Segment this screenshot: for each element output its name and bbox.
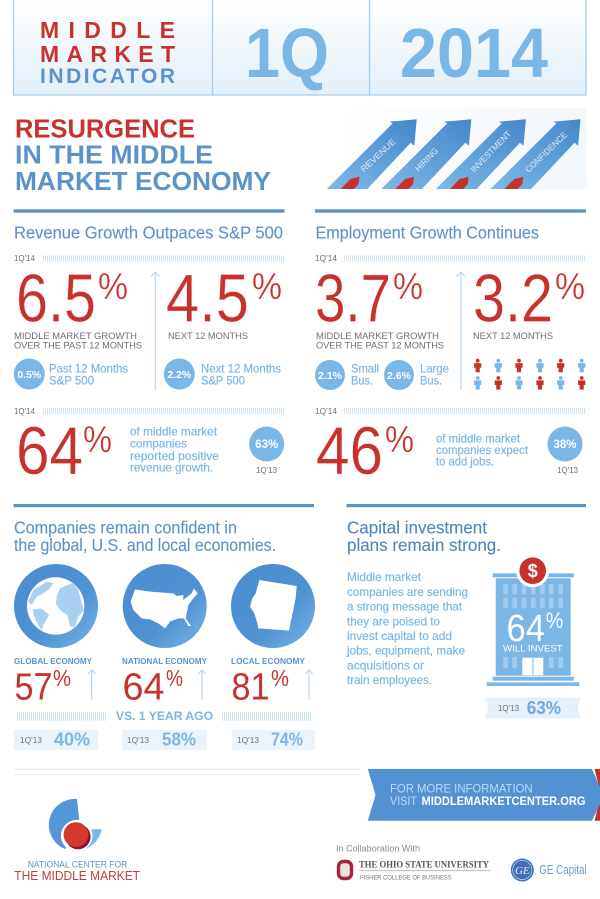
arrow: investment: [436, 119, 526, 189]
heading: capital investment: [347, 518, 501, 555]
comparison: national 1Q13: 58%: [162, 730, 196, 750]
heading: confidence: the global, U.S. and local economies.: [14, 535, 276, 555]
text: positive revenue growth: reported positive: [130, 449, 219, 463]
text: expect to add jobs: of middle market: [436, 432, 521, 446]
comparison: global 1Q13: [14, 730, 98, 750]
stat: global economy: 57: [14, 666, 52, 708]
badge: 38 percent 1Q13: [548, 426, 582, 475]
icon: USA map: [123, 564, 207, 648]
comparison: national 1Q13: [122, 730, 207, 750]
logo: National Center for the Middle Market: THE MIDDLE MARKET: [14, 869, 140, 883]
ribbon: 1Q13 63 percent: 63%: [527, 698, 561, 718]
text: capital investment body: companies are sending: [347, 585, 468, 599]
panel: employment growth: [315, 209, 586, 489]
callout: large business: Bus.: [420, 374, 442, 388]
stat: 3.2 percent next 12 months: %: [555, 266, 585, 307]
heading: capital investment: plans remain strong.: [347, 535, 501, 555]
comparison: national 1Q13: 1Q'13: [127, 735, 149, 745]
stat: 3.2 percent next 12 months: 3.2: [473, 260, 553, 336]
banner: for more information: VISIT: [390, 794, 418, 808]
text: capital investment body: train employees.: [347, 673, 432, 687]
callout: small business: 2.1%: [318, 370, 343, 382]
icon: logo mark: [49, 799, 102, 852]
panel: capital investment: [346, 504, 586, 718]
text: capital investment body: acquisitions or: [347, 658, 424, 672]
callout: S&P next 12 months: Next 12 Months: [201, 362, 281, 376]
label: vs 1 year ago: VS. 1 YEAR AGO: [116, 709, 213, 723]
comparison: local 1Q13: 1Q'13: [237, 735, 259, 745]
panel: employment growth: 1Q'14: [315, 406, 337, 416]
logo: National Center for the Middle Market: [14, 799, 140, 883]
heading: confidence: [14, 518, 276, 555]
logos: collaboration partners: [336, 844, 587, 882]
icon: globe: [14, 564, 98, 648]
panel: employment growth: 1Q'14: [315, 253, 337, 263]
icon: state map: [231, 564, 315, 648]
stat: 3.7 percent past 12 months: [315, 260, 444, 352]
stat: global economy: [14, 656, 95, 708]
callout: large business: [384, 360, 449, 390]
arrow: hiring: [381, 119, 471, 189]
logo: National Center for the Middle Market: NATIONAL CENTER FOR: [28, 860, 127, 871]
headline: Resurgence in the middle market economy: IN THE MIDDLE: [15, 142, 213, 170]
title: Middle Market Indicator: MARKET: [40, 41, 175, 67]
arrow: investment: INVESTMENT: [468, 128, 514, 174]
arrow: revenue: REVENUE: [359, 136, 398, 174]
icon: building with 64 percent: [487, 554, 579, 686]
panel: confidence in economies: [14, 504, 315, 750]
callout: large business: Large: [420, 362, 449, 376]
arrow: divider up: [457, 272, 465, 390]
text: expect to add jobs: companies expect: [436, 443, 529, 457]
arrow: confidence: CONFIDENCE: [523, 130, 569, 174]
title: Middle Market Indicator: INDICATOR: [40, 65, 175, 88]
stat: 6.5 percent past 12 months: OVER THE PAST 12 MONTHS: [14, 340, 142, 352]
text: positive revenue growth: [130, 425, 219, 475]
logos: collaboration partners: In Collaboration With: [336, 844, 420, 854]
headline: Resurgence in the middle market economy: RESURGENCE: [15, 116, 195, 144]
heading: revenue growth: Revenue Growth Outpaces S&P 500: [14, 222, 283, 242]
divider lines: [14, 768, 360, 775]
year label: 2014: [400, 14, 548, 92]
text: positive revenue growth: companies: [130, 437, 187, 451]
icon: building with 64 percent: %: [546, 608, 563, 633]
icon: dollar coin: $: [528, 561, 538, 581]
banner: for more information: [368, 769, 600, 821]
comparison: local 1Q13: 74%: [271, 730, 303, 750]
icons: people grid: [474, 359, 585, 390]
panel: revenue growth: 1Q'14: [14, 406, 35, 416]
badge: 38 percent 1Q13: 38%: [553, 439, 577, 451]
text: capital investment body: [346, 570, 468, 687]
heading: employment growth: Employment Growth Continues: [316, 222, 539, 242]
callout: S&P past 12 months: Past 12 Months: [49, 362, 128, 376]
stat: local economy: LOCAL ECONOMY: [231, 656, 305, 666]
callout: small business: Small: [351, 362, 379, 376]
stat: 3.7 percent past 12 months: OVER THE PAST 12 MONTHS: [316, 340, 444, 352]
text: expect to add jobs: [436, 432, 529, 469]
panel: header band: [14, 0, 586, 95]
heading: capital investment: Capital investment: [347, 518, 487, 538]
logo: GE Capital: [511, 858, 587, 882]
arrow: hiring: HIRING: [413, 145, 440, 173]
text: expect to add jobs: to add jobs.: [436, 455, 494, 469]
arrow: confidence: [490, 119, 580, 189]
badge: 38 percent 1Q13: 1Q'13: [557, 465, 578, 475]
banner: for more information: FOR MORE INFORMATION: [390, 782, 533, 796]
stat: 6.5 percent past 12 months: [14, 260, 142, 352]
arrow: divider up: [151, 272, 160, 390]
text: capital investment body: invest capital to add: [347, 629, 452, 643]
stat: 3.7 percent past 12 months: %: [393, 266, 423, 307]
stat: 4.5 percent next 12 months: 4.5: [166, 260, 249, 336]
text: capital investment body: a strong message that: [347, 600, 463, 614]
callout: S&P next 12 months: 2.2%: [167, 369, 192, 381]
stat: 64 percent positive revenue: 64: [16, 413, 83, 489]
text: positive revenue growth: of middle market: [130, 425, 218, 439]
title: Middle Market Indicator: [40, 17, 175, 88]
logo: Ohio State University: THE OHIO STATE UNIVERSITY: [359, 860, 489, 870]
stat: 6.5 percent past 12 months: %: [98, 266, 128, 307]
callout: S&P next 12 months: [164, 358, 281, 390]
stat: 4.5 percent next 12 months: %: [252, 266, 282, 307]
stat: 4.5 percent next 12 months: NEXT 12 MONTHS: [168, 331, 248, 342]
logo: GE Capital: GE: [515, 865, 530, 877]
stat: 3.2 percent next 12 months: NEXT 12 MONTHS: [473, 331, 553, 342]
comparison: local 1Q13: [232, 730, 315, 750]
text: capital investment body: jobs, equipment, make: [346, 644, 465, 658]
callout: S&P past 12 months: 0.5%: [17, 369, 42, 381]
title: Middle Market Indicator: MIDDLE: [40, 17, 175, 43]
logo: Ohio State University: FISHER COLLEGE OF BUSINESS: [360, 874, 452, 881]
stat: national economy: NATIONAL ECONOMY: [122, 656, 207, 666]
comparison: global 1Q13: 1Q'13: [20, 735, 42, 745]
headline: Resurgence in the middle market economy: MARKET ECONOMY: [15, 168, 271, 196]
stat: 64 percent positive revenue: %: [83, 419, 112, 460]
panel: revenue growth: [14, 209, 285, 489]
stat: global economy: %: [53, 665, 71, 691]
graphic: four rising arrows: [327, 108, 586, 189]
text: capital investment body: Middle market: [347, 570, 422, 584]
icon: building with 64 percent: 64: [506, 608, 545, 650]
stat: national economy: %: [166, 665, 183, 691]
stat: national economy: 64: [122, 666, 164, 708]
panel: revenue growth: 1Q'14: [14, 253, 35, 263]
headline: Resurgence in the middle market economy: [15, 116, 271, 196]
stat: 46 percent expect to add jobs: 46: [316, 413, 383, 489]
arrow: revenue: [327, 119, 417, 189]
icon: building with 64 percent: WILL INVEST: [503, 644, 563, 655]
stat: 46 percent expect to add jobs: %: [385, 419, 414, 460]
callout: small business: [315, 360, 379, 390]
heading: confidence: Companies remain confident in: [14, 518, 237, 538]
stat: local economy: 81: [232, 666, 270, 708]
stat: national economy: [122, 656, 207, 708]
badge: 63 percent 1Q13: 63%: [255, 439, 278, 451]
stat: local economy: %: [271, 665, 289, 691]
logo: GE Capital: GE Capital: [539, 863, 587, 877]
ribbon: 1Q13 63 percent: [485, 698, 581, 718]
callout: S&P past 12 months: S&P 500: [49, 374, 94, 388]
badge: 63 percent 1Q13: [249, 426, 284, 475]
callout: S&P next 12 months: S&P 500: [201, 374, 245, 388]
text: positive revenue growth: revenue growth.: [130, 461, 213, 475]
stat: local economy: [231, 656, 313, 708]
stat: 6.5 percent past 12 months: 6.5: [16, 260, 96, 336]
callout: S&P past 12 months: [14, 358, 128, 390]
stat: 3.7 percent past 12 months: MIDDLE MARKET GROWTH: [316, 331, 439, 342]
stat: 3.7 percent past 12 months: 3.7: [315, 260, 391, 336]
banner: for more information: MIDDLEMARKETCENTER.ORG: [422, 794, 586, 808]
comparison: global 1Q13: 40%: [54, 730, 90, 750]
stat: 6.5 percent past 12 months: MIDDLE MARKET GROWTH: [14, 331, 137, 342]
text: capital investment body: they are poised to: [347, 614, 440, 628]
stat: global economy: GLOBAL ECONOMY: [14, 656, 92, 666]
logo: Ohio State University: [338, 860, 490, 881]
quarter label: 1Q: [245, 14, 329, 92]
callout: large business: 2.6%: [387, 370, 412, 382]
badge: 63 percent 1Q13: 1Q'13: [256, 465, 277, 475]
ribbon: 1Q13 63 percent: 1Q'13: [498, 703, 519, 713]
callout: small business: Bus.: [351, 374, 373, 388]
